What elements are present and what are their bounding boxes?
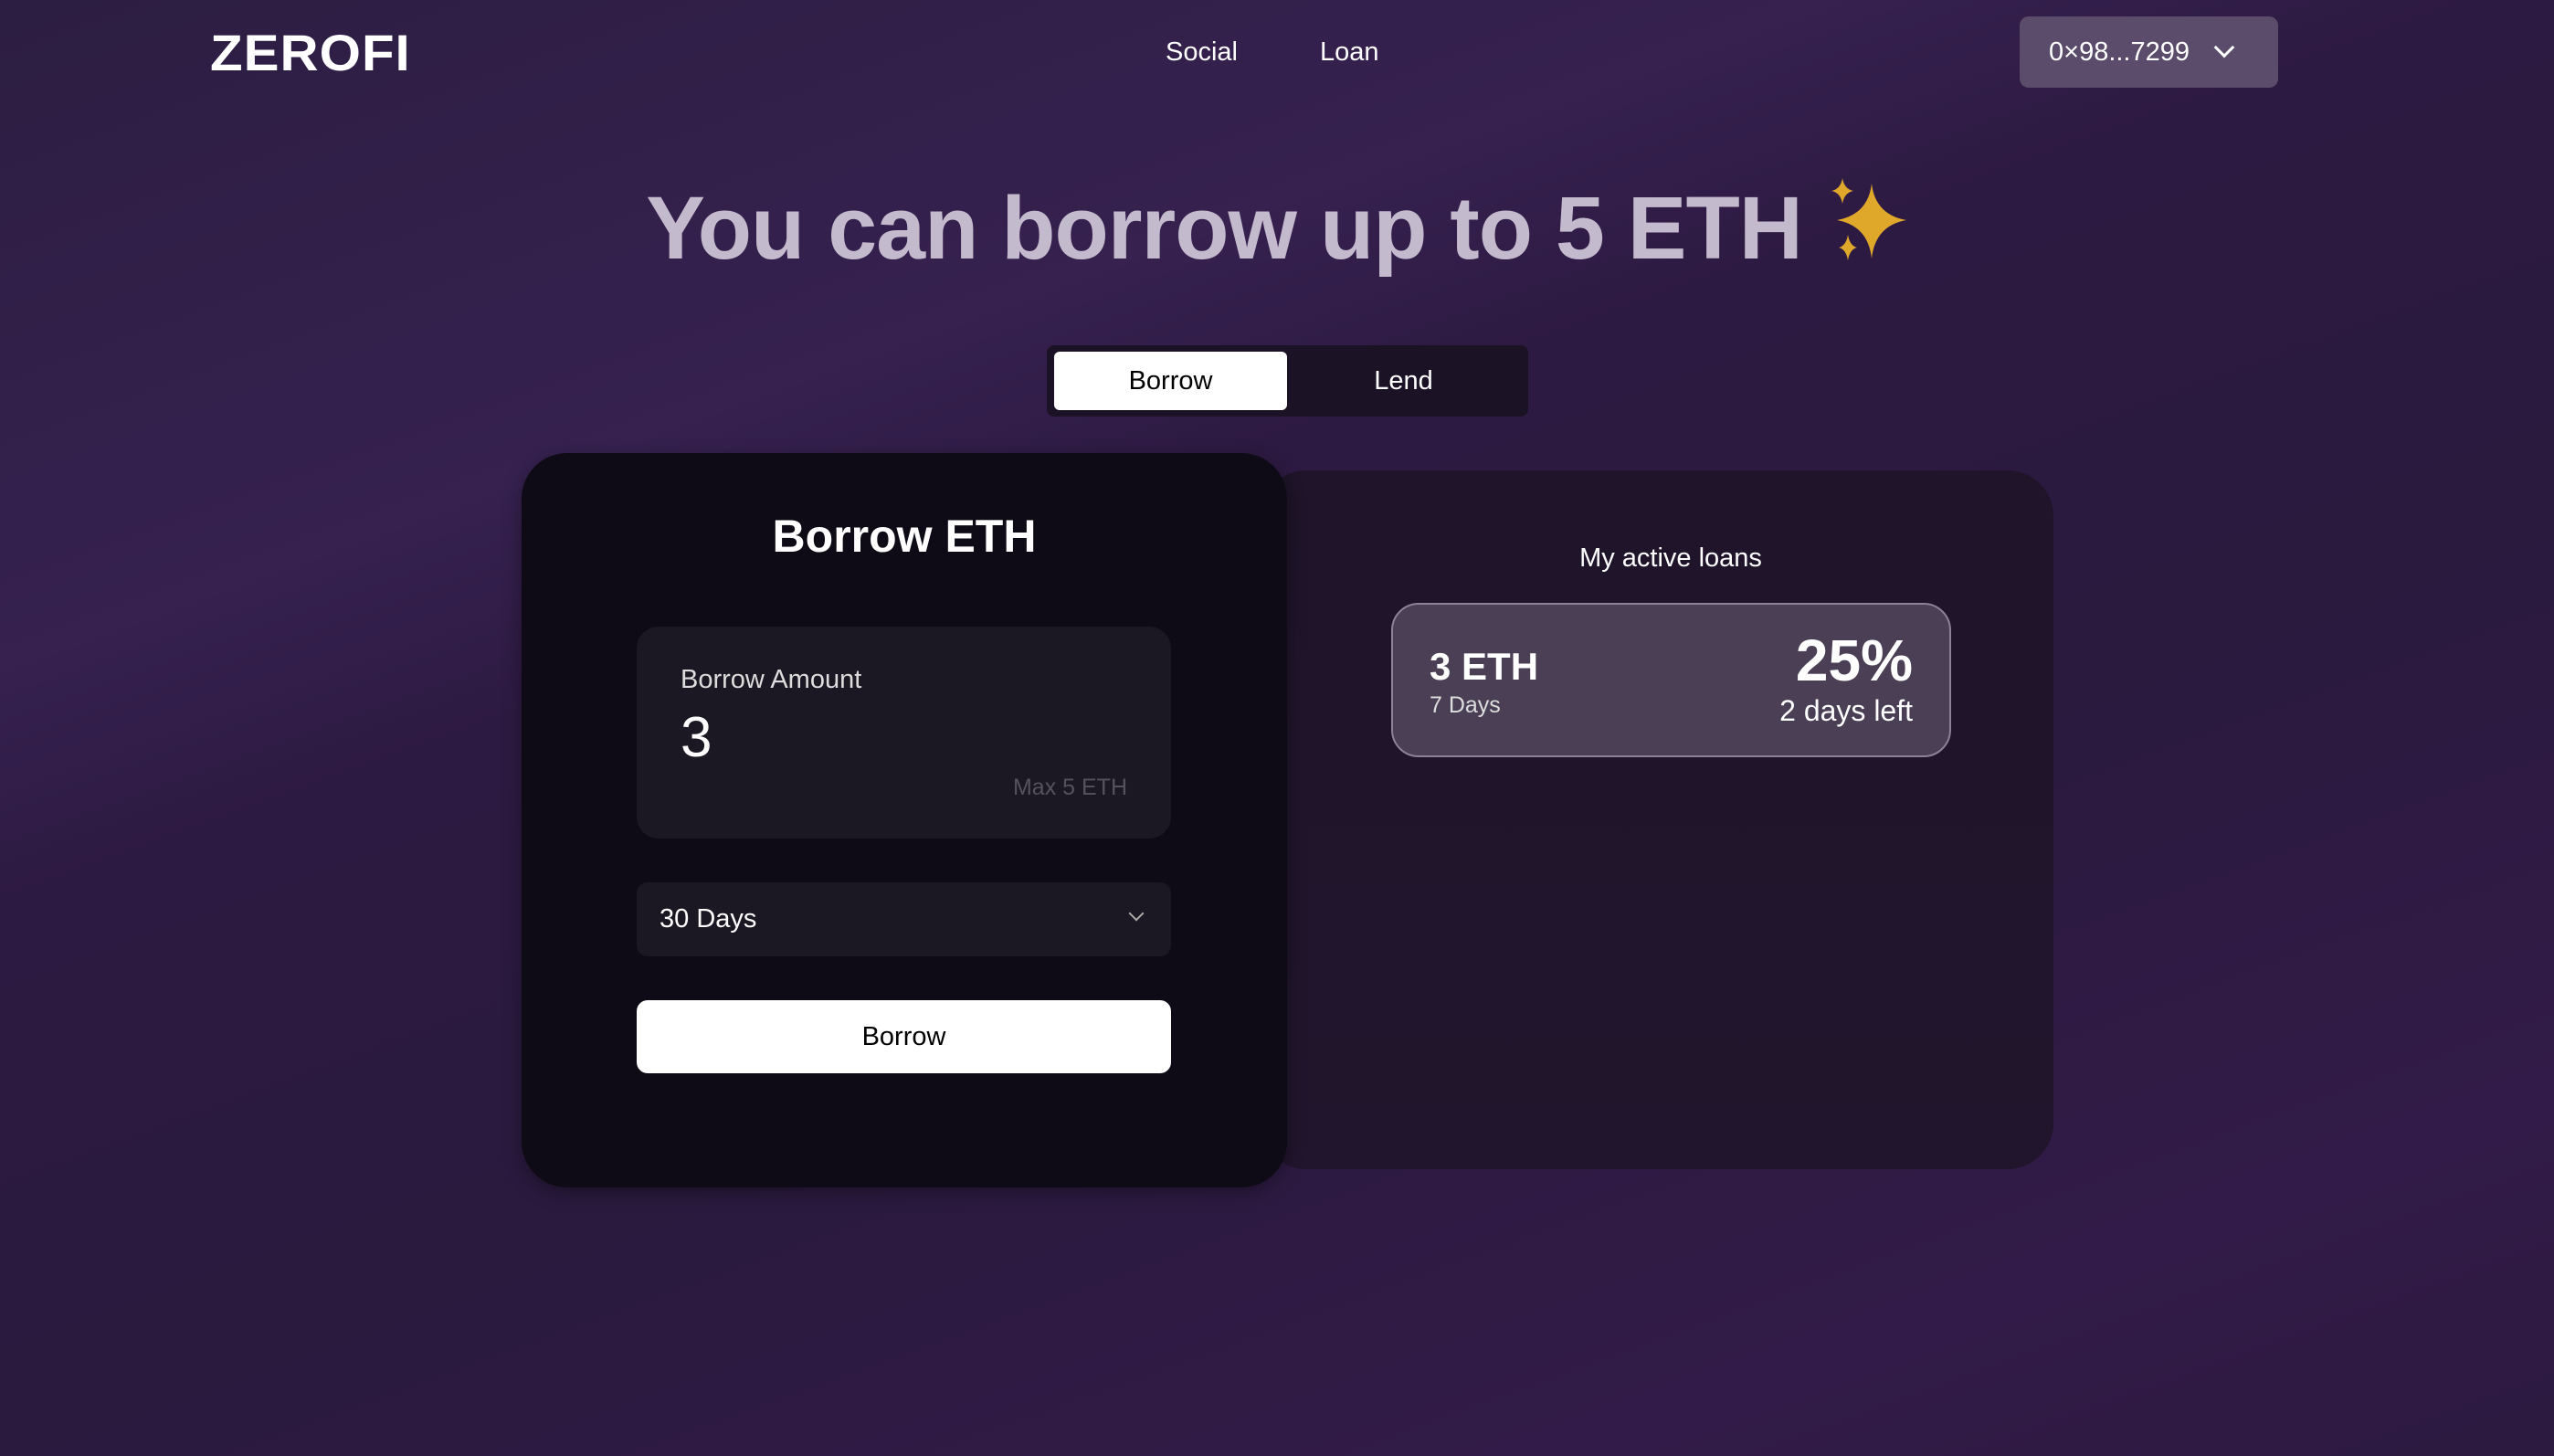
button: borrow <box>637 1000 1171 1073</box>
panel: borrow form <box>522 453 1287 1187</box>
wallet button <box>2020 16 2278 88</box>
loan card: 25% <box>1796 628 1913 693</box>
loan card: 3 ETH <box>1430 645 1538 688</box>
button: borrow: Borrow <box>862 1022 945 1051</box>
title: You can borrow up to 5 ETH <box>646 178 1802 278</box>
toggle: borrow active <box>1054 352 1287 410</box>
toggle: lend: Lend <box>1374 366 1433 396</box>
toggle: borrow active: Borrow <box>1129 366 1212 396</box>
heading: my active loans: My active loans <box>1579 543 1762 573</box>
wallet button: 0×98...7299 <box>2049 37 2190 67</box>
loan card: 7 Days <box>1430 692 1501 718</box>
toggle <box>1047 345 1528 417</box>
input: borrow amount: 3 <box>681 706 712 769</box>
loan card: 2 days left <box>1779 694 1913 727</box>
loan card <box>1391 603 1951 757</box>
nav: loan: Loan <box>1320 37 1379 67</box>
input: borrow amount: Max 5 ETH <box>1013 775 1127 800</box>
select: duration: 30 Days <box>660 904 756 934</box>
select: duration <box>637 882 1171 956</box>
panel: active loans <box>1261 470 2053 1169</box>
logo: ZEROFI <box>210 24 411 81</box>
heading: borrow eth: Borrow ETH <box>773 511 1036 562</box>
nav: social: Social <box>1166 37 1238 67</box>
input: borrow amount: Borrow Amount <box>681 665 861 694</box>
input: borrow amount <box>637 627 1171 839</box>
